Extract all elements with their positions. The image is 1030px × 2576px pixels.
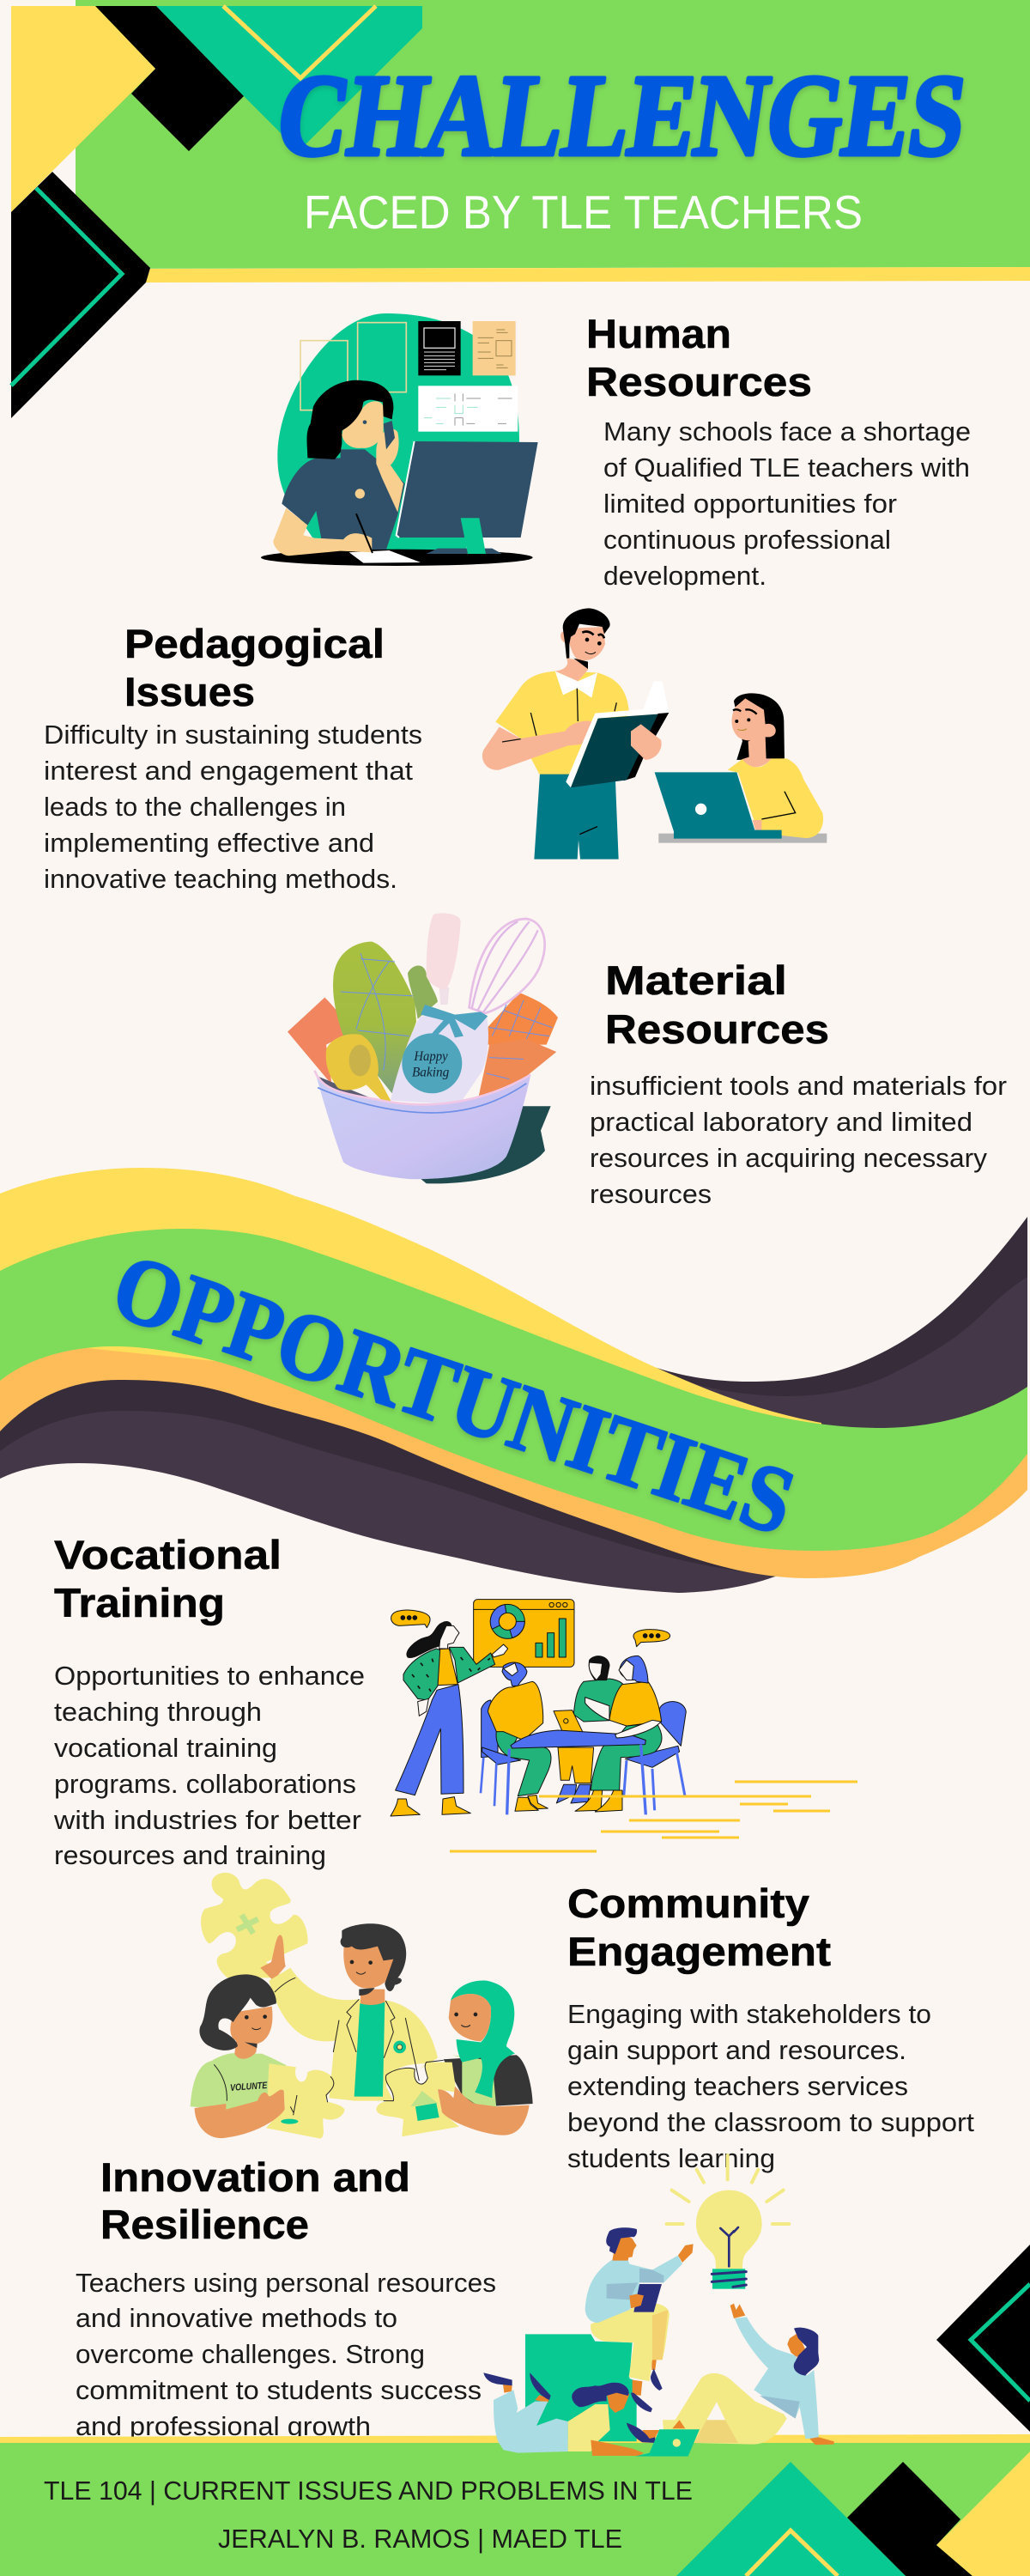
body text: leads to the challenges in (44, 792, 346, 822)
body text: gain support and resources. (567, 2035, 906, 2065)
heading: Human (586, 311, 731, 356)
body text: of Qualified TLE teachers with (603, 453, 970, 483)
heading line 2: Engagement (567, 1929, 831, 1974)
heading line 2: Resources (605, 1006, 829, 1052)
body text: implementing effective and (44, 828, 374, 858)
body text: Engaging with stakeholders to (567, 1999, 931, 2029)
section: vocational training (53, 1532, 365, 1870)
body text: students learning (567, 2143, 775, 2173)
body text: development. (603, 561, 766, 591)
wave band (0, 1168, 1027, 1593)
section: human resources (586, 311, 971, 591)
header banner (11, 0, 1030, 418)
body text: resources and training (54, 1840, 326, 1870)
heading: Community (567, 1880, 809, 1926)
body text: and professional growth (76, 2411, 371, 2441)
body text: extending teachers services (567, 2071, 908, 2101)
body text: limited opportunities for (603, 489, 897, 519)
body text: vocational training (54, 1733, 277, 1763)
section: pedagogical issues (44, 621, 422, 894)
body text: resources in acquiring necessary (590, 1143, 988, 1173)
heading: Vocational (54, 1532, 282, 1577)
label text: Happy (413, 1049, 448, 1064)
section: material resources (590, 957, 1007, 1209)
icon: right chevron (936, 2245, 1030, 2432)
subtitle: FACED BY TLE TEACHERS (304, 185, 863, 239)
section: innovation and resilience (76, 2154, 496, 2441)
body text (76, 2268, 496, 2441)
illustration: woman at computer (261, 313, 538, 566)
body text (590, 1071, 1007, 1209)
body text (603, 416, 971, 591)
body text: overcome challenges. Strong (76, 2339, 425, 2369)
body text: programs. collaborations (54, 1769, 356, 1799)
heading: Pedagogical (124, 621, 385, 666)
icon: geometric shapes top left (11, 6, 422, 418)
body text (44, 720, 422, 894)
body text: Opportunities to enhance (54, 1661, 365, 1691)
body text (567, 1999, 974, 2173)
body text: continuous professional (603, 525, 891, 555)
illustration: people around a light bulb (483, 2155, 834, 2457)
heading line 2: Training (54, 1580, 225, 1625)
body text (53, 1661, 365, 1870)
footer line 2: JERALYN B. RAMOS | MAED TLE (218, 2524, 622, 2554)
heading line 2: Issues (124, 669, 255, 714)
body text: innovative teaching methods. (44, 864, 397, 894)
heading: opportunities: OPPORTUNITIES (100, 1233, 807, 1555)
body text: Difficulty in sustaining students (44, 720, 422, 750)
label text line 2: Baking (412, 1065, 450, 1079)
illustration: man with book and woman with laptop (482, 608, 827, 860)
body text: with industries for better (53, 1805, 361, 1835)
body text: commitment to students success (76, 2375, 482, 2405)
shirt text: VOLUNTE (230, 2081, 268, 2093)
body text: beyond the classroom to support (567, 2107, 974, 2137)
body text: practical laboratory and limited (590, 1107, 972, 1137)
heading: Material (605, 957, 787, 1003)
footer shapes (676, 2451, 1030, 2576)
body text: and innovative methods to (76, 2303, 397, 2333)
footer line 1: TLE 104 | CURRENT ISSUES AND PROBLEMS IN TLE (44, 2476, 693, 2506)
body text: Teachers using personal resources (76, 2268, 496, 2298)
body text: interest and engagement that (44, 756, 413, 786)
illustration: community puzzle people (191, 1873, 533, 2139)
heading line 2: Resilience (100, 2202, 309, 2247)
body text: insufficient tools and materials for (590, 1071, 1007, 1101)
footer (0, 2434, 1030, 2576)
body text: Many schools face a shortage (603, 416, 971, 447)
body text: resources (590, 1179, 712, 1209)
section: community engagement (567, 1880, 974, 2173)
heading line 2: Resources (586, 359, 812, 404)
illustration: team meeting (391, 1600, 857, 1851)
body text: teaching through (54, 1697, 262, 1727)
heading: Innovation and (100, 2154, 410, 2200)
illustration: baking basket (288, 913, 558, 1183)
